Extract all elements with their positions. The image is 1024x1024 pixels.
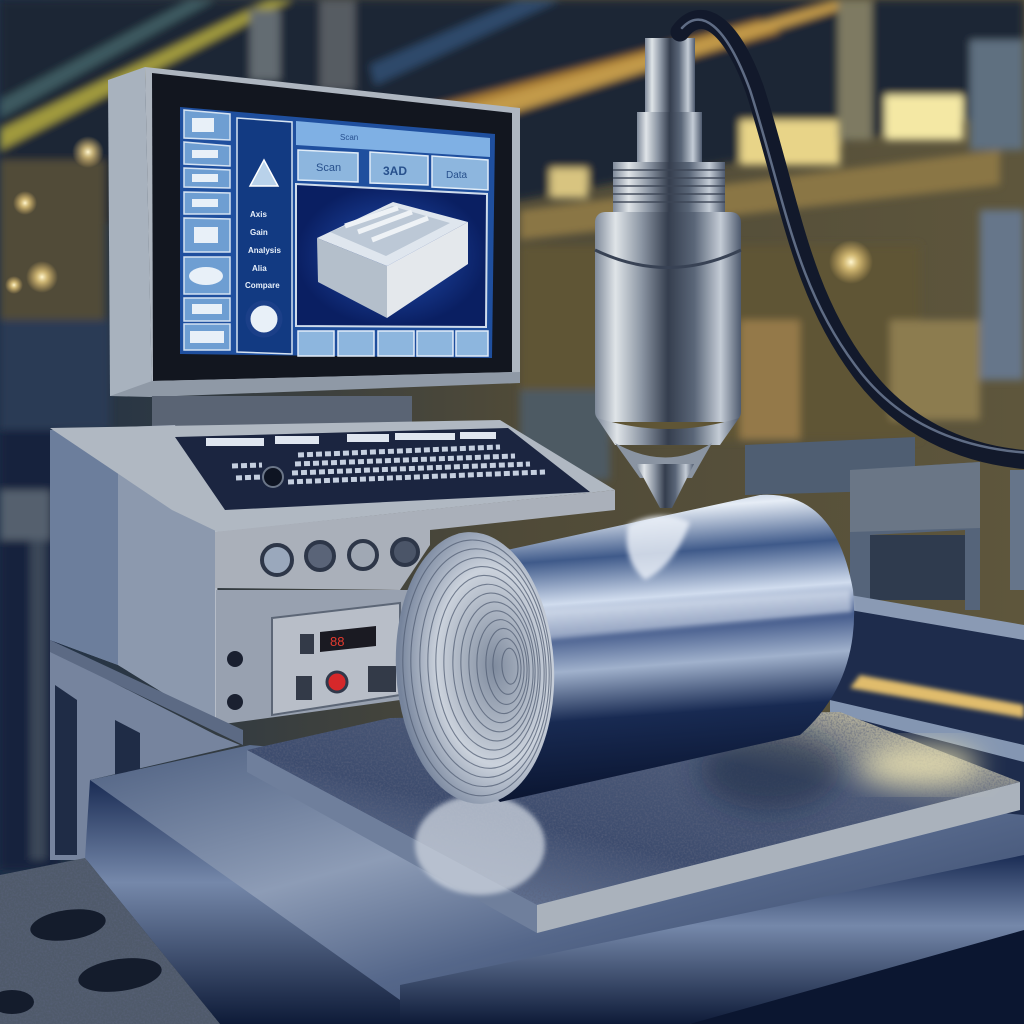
base table <box>85 745 1024 1024</box>
tabs <box>298 150 488 190</box>
sidebar labels: Axis <box>250 210 267 219</box>
keypad <box>175 428 590 510</box>
inspection plate <box>247 712 1020 933</box>
sidebar labels: Compare <box>245 281 280 290</box>
sidebar labels: Analysis <box>248 246 281 255</box>
screen: 3AD <box>383 164 407 178</box>
sidebar labels: Alia <box>252 264 267 273</box>
perforated bed <box>0 858 220 1024</box>
cable <box>680 19 1024 460</box>
metal cylinder <box>389 495 854 808</box>
sidebar labels: Gain <box>250 228 268 237</box>
ultrasonic probe <box>595 38 741 508</box>
control console: 88 <box>330 634 344 649</box>
screen: Scan <box>316 162 341 174</box>
ridged end face <box>389 528 561 808</box>
sidebar labels <box>245 210 281 290</box>
lower cabinet <box>50 650 240 860</box>
control console <box>50 420 615 860</box>
screen <box>180 107 495 358</box>
sidebar buttons <box>184 110 230 350</box>
lights <box>5 136 873 294</box>
sidebar icons <box>189 118 224 343</box>
lower front panel <box>216 590 410 725</box>
screen: Scan <box>340 133 358 142</box>
3D block <box>317 202 468 318</box>
screen: Data <box>446 170 468 181</box>
bottom buttons <box>298 331 488 356</box>
3D view panel <box>296 184 487 327</box>
background machines <box>745 437 1024 840</box>
knobs <box>262 539 418 575</box>
top bar <box>296 121 490 157</box>
monitor <box>108 67 520 428</box>
middle column <box>237 118 292 354</box>
